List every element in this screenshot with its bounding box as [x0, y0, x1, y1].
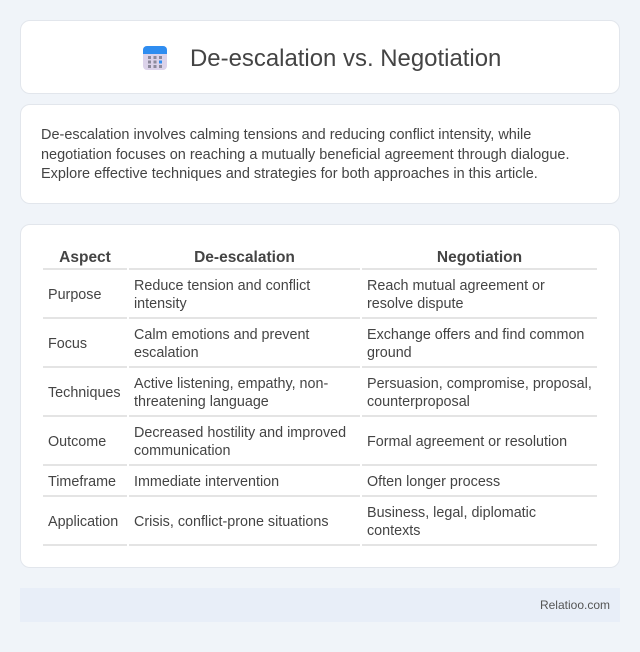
title: De-escalation vs. Negotiation: [190, 45, 501, 72]
cell: Purpose de-escalation: [134, 278, 310, 312]
cell: Application de-escalation: Crisis, conflict-prone situations: [134, 514, 329, 530]
intro text: negotiation focuses on reaching a mutually beneficial agreement through dialogue.: [41, 146, 569, 162]
footer credit: Relatioo.com: [540, 598, 610, 612]
header panel: [20, 20, 620, 94]
cell: Application negotiation: Business, legal, diplomatic: [367, 505, 536, 521]
row: Application: Application: [48, 514, 118, 530]
cell: Purpose de-escalation: Reduce tension and conflict: [134, 278, 310, 294]
cell: Outcome de-escalation: [134, 425, 346, 459]
cell: Focus negotiation: [367, 327, 584, 361]
cell: Focus negotiation: Exchange offers and find common: [367, 327, 584, 343]
cell: Purpose negotiation: resolve dispute: [367, 296, 463, 312]
row: Purpose: Purpose: [48, 287, 101, 303]
cell: Outcome de-escalation: communication: [134, 443, 230, 459]
cell: Purpose de-escalation: intensity: [134, 296, 187, 312]
header: De-escalation: De-escalation: [194, 249, 295, 266]
cell: Techniques negotiation: Persuasion, compromise, proposal,: [367, 376, 592, 392]
intro text: De-escalation involves calming tensions and reducing conflict intensity, while: [41, 127, 531, 143]
cell: Techniques de-escalation: [134, 376, 328, 410]
table panel: [20, 224, 620, 568]
icon: calendar: [143, 46, 167, 70]
intro text: Explore effective techniques and strategies for both approaches in this article.: [41, 166, 538, 182]
row: Focus: Focus: [48, 336, 87, 352]
cell: Application negotiation: [367, 505, 536, 539]
intro panel: [20, 104, 620, 204]
cell: Focus de-escalation: Calm emotions and prevent: [134, 327, 309, 343]
header: Aspect: Aspect: [59, 249, 111, 266]
cell: Application negotiation: contexts: [367, 523, 420, 539]
cell: Timeframe negotiation: Often longer process: [367, 474, 500, 490]
cell: Techniques de-escalation: threatening language: [134, 394, 269, 410]
footer bar: [20, 588, 620, 622]
cell: Timeframe de-escalation: Immediate intervention: [134, 474, 279, 490]
cell: Purpose negotiation: [367, 278, 545, 312]
row: Techniques: Techniques: [48, 385, 121, 401]
intro text: [41, 127, 569, 182]
cell: Focus negotiation: ground: [367, 345, 412, 361]
comparison table: [43, 249, 597, 546]
cell: Outcome de-escalation: Decreased hostility and improved: [134, 425, 346, 441]
row: Outcome: Outcome: [48, 434, 106, 450]
cell: Purpose negotiation: Reach mutual agreement or: [367, 278, 545, 294]
cell: Techniques negotiation: counterproposal: [367, 394, 470, 410]
cell: Focus de-escalation: [134, 327, 310, 361]
cell: Outcome negotiation: Formal agreement or resolution: [367, 434, 567, 450]
row: Timeframe: Timeframe: [48, 474, 116, 490]
cell: Techniques de-escalation: Active listening, empathy, non-: [134, 376, 328, 392]
header: Negotiation: Negotiation: [437, 249, 522, 266]
cell: Focus de-escalation: escalation: [134, 345, 199, 361]
cell: Techniques negotiation: [367, 376, 592, 410]
